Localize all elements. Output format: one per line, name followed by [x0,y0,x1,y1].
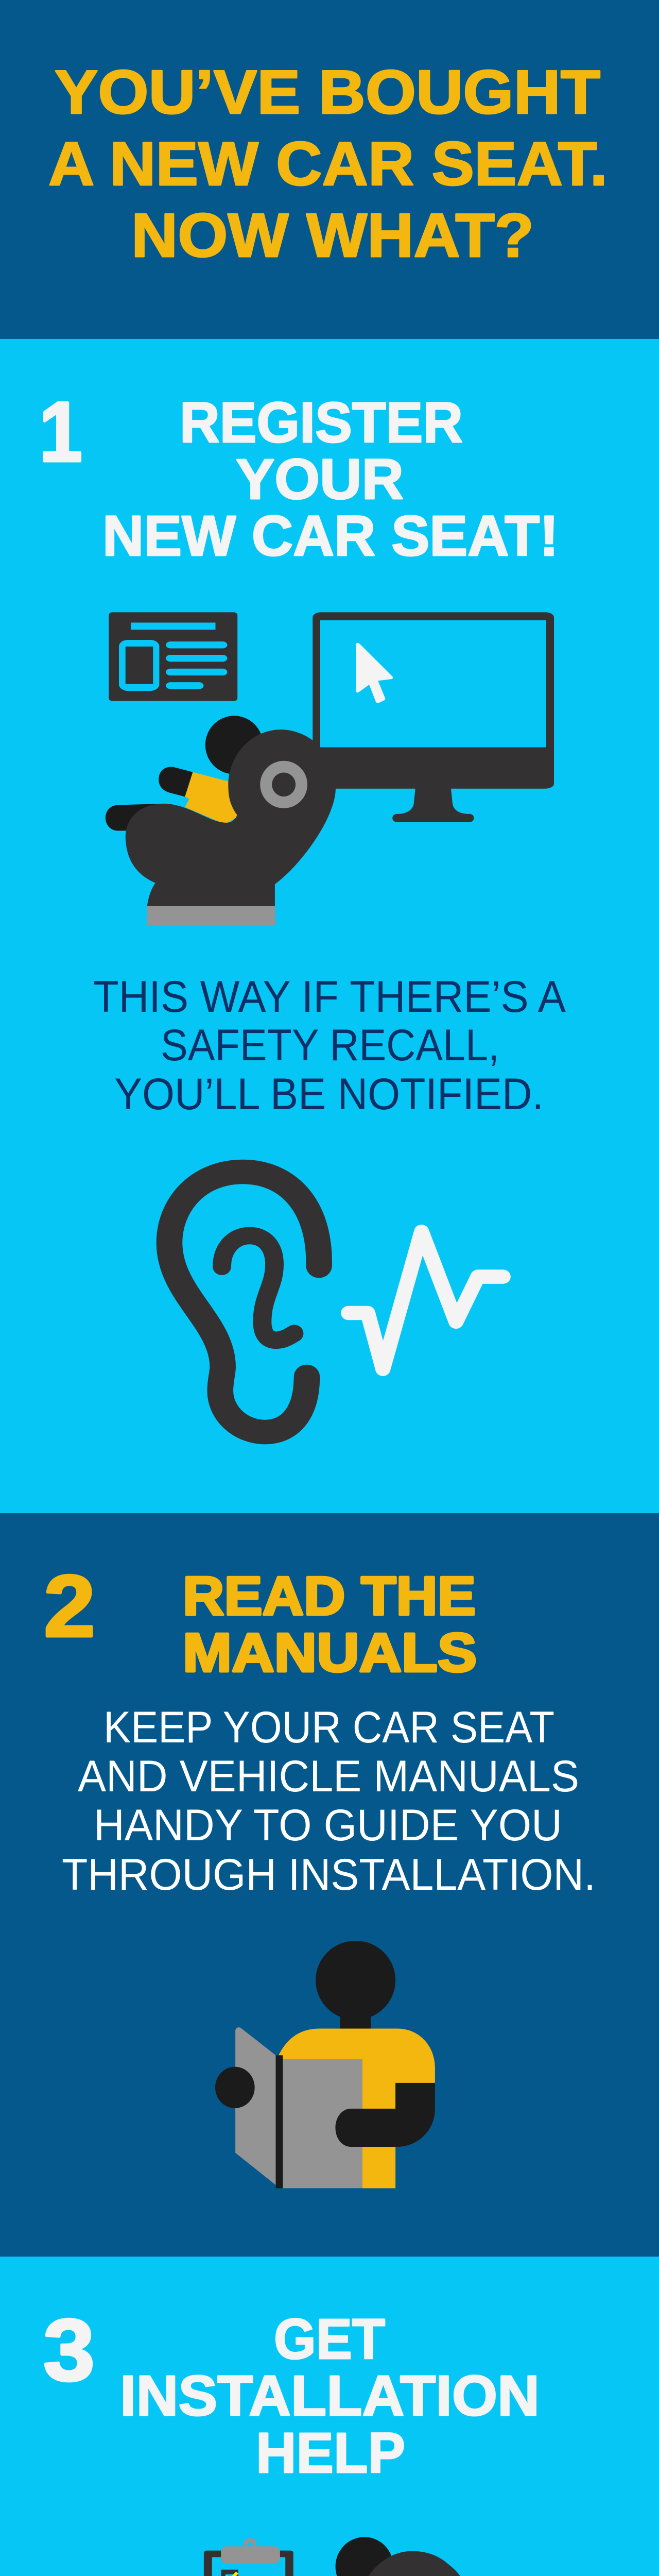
heading: get installation help: HELP [256,2421,405,2485]
heading: read the manuals: READ THE [183,1566,476,1626]
heading: read the manuals [183,1566,477,1683]
panel: step 1 register [0,339,659,1513]
heading: register your new car seat [102,391,559,568]
icon: child in car seat [232,2537,470,2576]
icon: sound wave [349,1232,503,1369]
title: A NEW CAR SEAT. [48,129,608,198]
icon: checklist clipboard [204,2538,293,2576]
step number 1: 1 [39,384,82,479]
heading: get installation help: GET [274,2308,385,2371]
step number 2: 2 [44,1557,95,1655]
illustration: person reading manual [215,1941,435,2188]
heading: register your new car seat: REGISTER [180,391,463,454]
title: YOU’VE BOUGHT [55,58,600,127]
heading: read the manuals: MANUALS [183,1622,477,1683]
title: NOW WHAT? [131,201,534,270]
icon: registration card [109,612,237,701]
text: safety recall note: YOU’LL BE NOTIFIED. [114,1070,544,1119]
heading: register your new car seat: YOUR [236,448,404,511]
text: safety recall note: THIS WAY IF THERE’S A [93,972,566,1022]
heading: get installation help [120,2308,540,2485]
illustration: ear and sound wave [169,1172,503,1432]
heading: register your new car seat: NEW CAR SEAT! [102,504,559,568]
step number 3: 3 [43,2301,95,2399]
text: safety recall note [93,972,566,1119]
text: keep manuals handy [62,1703,596,1900]
panel: step 2 read the manuals [0,1513,659,2257]
text: safety recall note: SAFETY RECALL, [161,1021,499,1070]
icon: ear [169,1172,319,1432]
text: keep manuals handy: AND VEHICLE MANUALS [78,1752,579,1801]
panel: title band [0,0,659,339]
illustration: registration card, monitor and car seat [106,612,554,925]
illustration: clipboard and car seat [204,2537,470,2576]
text: keep manuals handy: HANDY TO GUIDE YOU [94,1801,562,1850]
icon: computer monitor [313,612,554,822]
text: keep manuals handy: THROUGH INSTALLATION. [62,1850,596,1900]
icon: child in car seat [106,716,336,925]
text: keep manuals handy: KEEP YOUR CAR SEAT [103,1703,554,1752]
icon: mouse cursor [356,643,393,703]
heading: get installation help: INSTALLATION [120,2364,540,2428]
panel: step 3 installation help [0,2257,659,2576]
title [48,58,608,270]
